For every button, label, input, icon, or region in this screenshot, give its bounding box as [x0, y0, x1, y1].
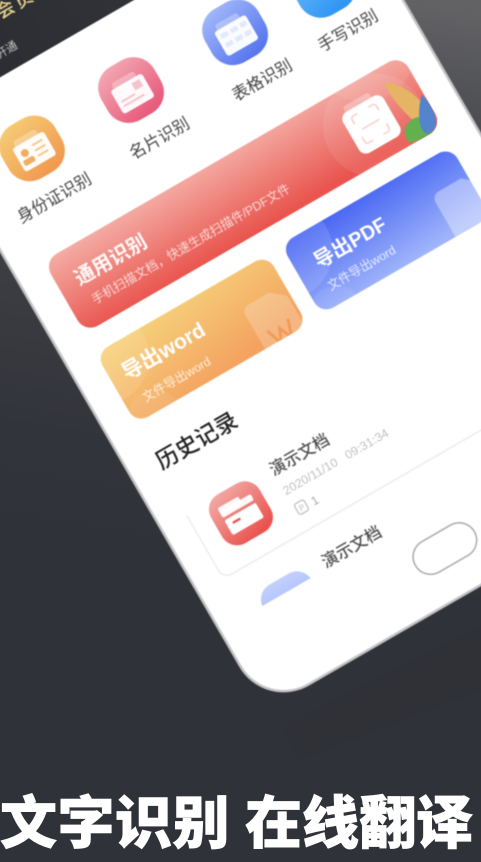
card title: 导出PDF — [310, 213, 391, 273]
card subtitle: 文件导出word — [325, 242, 398, 293]
icon: partial blue — [260, 570, 311, 606]
history item 1 — [184, 252, 481, 579]
feature: handwriting recognition — [278, 0, 381, 55]
label: 名片识别 — [126, 114, 193, 163]
card subtitle: 手机扫描文档，快速生成扫描件/PDF文件 — [89, 181, 293, 307]
home button — [407, 516, 481, 581]
background facet — [283, 625, 481, 760]
page count: P — [298, 503, 307, 513]
decoration: leaves on general card — [384, 83, 436, 143]
feature: ID card recognition — [0, 104, 95, 227]
icon: folder — [203, 475, 279, 552]
leaf: green — [405, 117, 434, 143]
feature: table recognition — [191, 0, 296, 105]
page count — [294, 493, 322, 517]
icon: table — [193, 0, 277, 74]
history item 2 — [260, 524, 384, 606]
item title: 演示文档 — [266, 430, 333, 479]
card title: 导出word — [118, 319, 210, 385]
member header band — [0, 0, 311, 108]
icon: ID card — [0, 107, 74, 190]
leaf: blue — [419, 95, 436, 133]
card: general recognition — [48, 60, 438, 328]
headline part 1: 文字识别 — [0, 792, 230, 856]
icon: handwriting — [282, 0, 365, 27]
icon: business card — [89, 48, 173, 132]
icon: word watermark — [244, 292, 302, 350]
headline — [0, 792, 473, 856]
feature: business card recognition — [88, 47, 193, 163]
leaf: wheat — [384, 82, 421, 120]
card: export PDF — [285, 150, 481, 310]
item card outline — [187, 258, 481, 579]
card: export word — [100, 259, 304, 420]
headline part 2: 在线翻译 — [245, 792, 473, 856]
page count: 1 — [308, 493, 322, 508]
label: 手写识别 — [315, 6, 381, 55]
label: 表格识别 — [229, 55, 296, 105]
card subtitle: 文件导出word — [140, 353, 213, 405]
item title: 演示文档 — [318, 522, 385, 572]
card title: 通用识别 — [70, 230, 151, 290]
item date: 2020/11/10 09:31:34 — [280, 426, 391, 498]
history heading: 历史记录 — [152, 408, 242, 474]
icon: PDF watermark — [434, 178, 481, 237]
icon: scan frame — [336, 87, 404, 157]
label: 身份证识别 — [14, 169, 95, 227]
